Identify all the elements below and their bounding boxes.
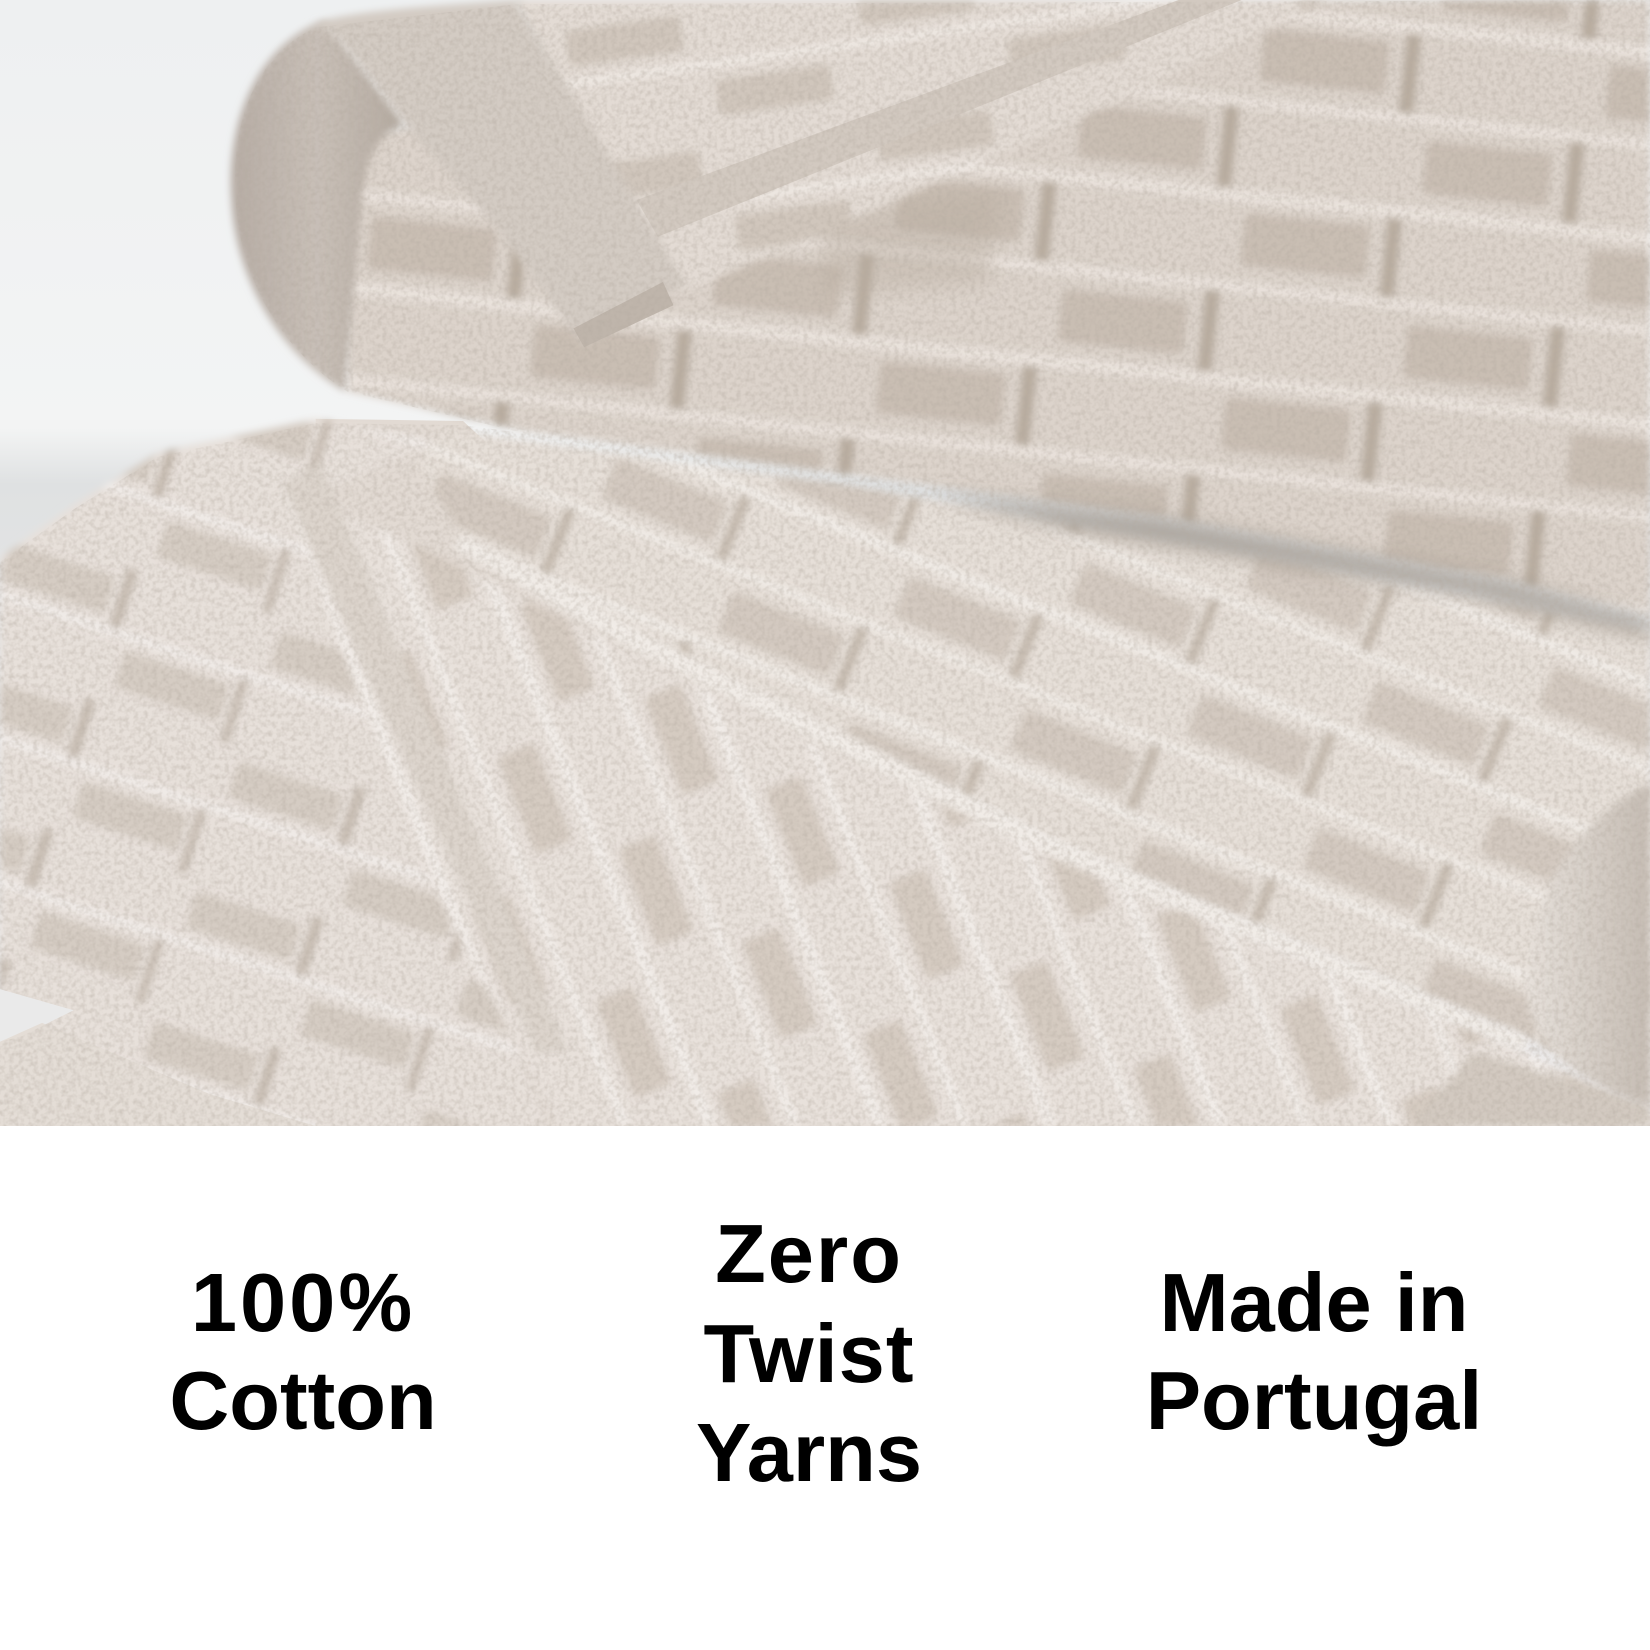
caption: Zero Twist Yarns: Twist bbox=[704, 1306, 914, 1400]
towel: bottom centre bbox=[282, 463, 1650, 1126]
roll end bbox=[1527, 784, 1650, 1105]
caption: Made in Portugal: Portugal bbox=[1146, 1354, 1482, 1447]
backdrop bbox=[0, 0, 1650, 1126]
caption: 100% Cotton: Cotton bbox=[169, 1354, 437, 1447]
caption: Zero Twist Yarns bbox=[696, 1207, 922, 1499]
photo: stacked textured towels bbox=[0, 0, 1650, 1126]
towel: bottom left bbox=[0, 419, 547, 1126]
caption: Zero Twist Yarns: Yarns bbox=[696, 1406, 922, 1499]
caption: 100% Cotton bbox=[169, 1256, 437, 1447]
caption: Zero Twist Yarns: Zero bbox=[715, 1207, 903, 1300]
caption: 100% Cotton: 100% bbox=[191, 1256, 415, 1349]
terry texture overlay bbox=[0, 0, 1650, 1126]
towel: top body bbox=[347, 0, 1650, 638]
towel base fill bbox=[316, 419, 1650, 1126]
roll edge of top towel bbox=[231, 21, 405, 391]
fold flap bbox=[316, 0, 1328, 347]
caption: Made in Portugal bbox=[1146, 1256, 1482, 1447]
caption: Made in Portugal: Made in bbox=[1160, 1256, 1468, 1349]
towel: middle rolled bbox=[416, 429, 1650, 1105]
